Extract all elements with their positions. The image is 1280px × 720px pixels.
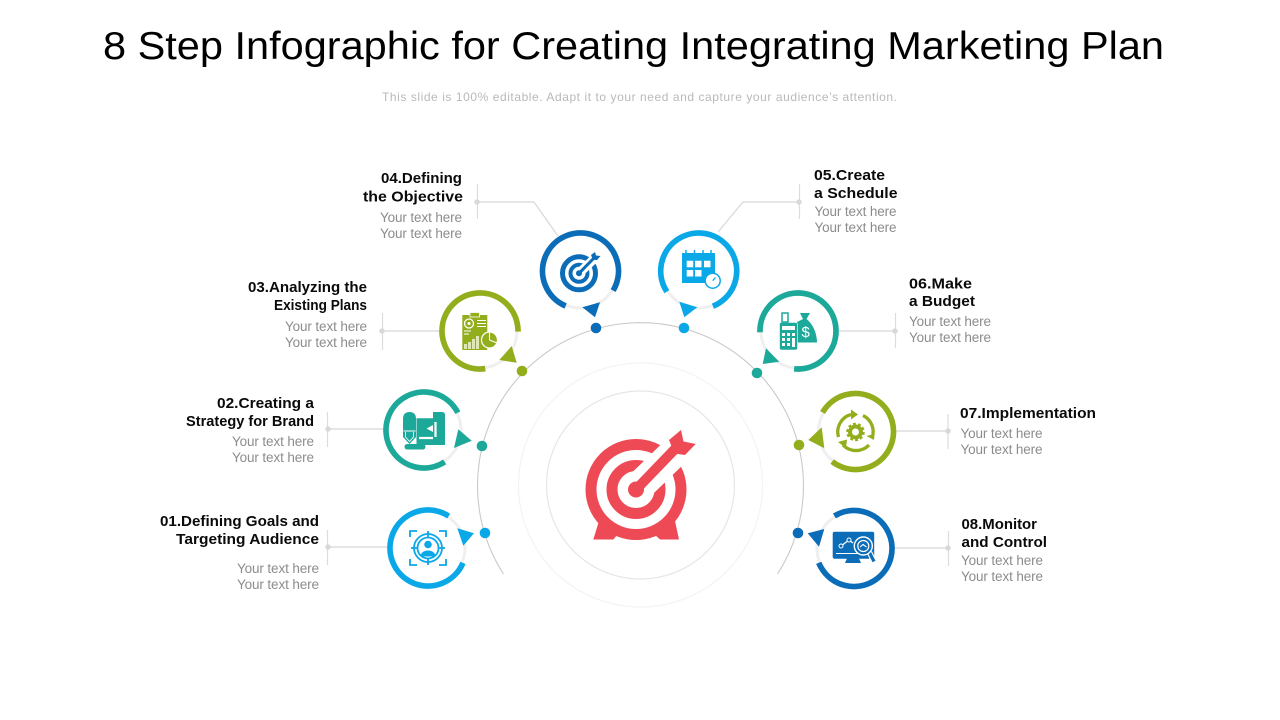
step 05 (646, 167, 898, 333)
label 05: Your text here (814, 220, 896, 235)
label 02: 02.Creating a (217, 395, 315, 412)
label 06: Your text here (909, 314, 991, 329)
central concentric rings (477, 323, 804, 607)
ring 04 with pointer (531, 221, 630, 333)
label 04: Your text here (380, 226, 462, 241)
label 05: a Schedule (814, 185, 898, 202)
label 03: 03.Analyzing the (248, 279, 367, 296)
label 03 (248, 279, 367, 350)
leader line 01 (325, 530, 388, 565)
label 05 (814, 167, 898, 235)
step 03 (248, 279, 527, 376)
label 05: 05.Create (814, 167, 885, 184)
label 03: Your text here (285, 319, 367, 334)
icon: calendar and clock (682, 250, 720, 288)
icon: blueprint strategy (403, 412, 445, 450)
step 02 (186, 377, 487, 483)
ring 05 with pointer (646, 218, 751, 333)
label 02: Strategy for Brand (186, 413, 314, 430)
label 03: Your text here (285, 335, 367, 350)
label 08: 08.Monitor (962, 516, 1037, 533)
icon: calculator and money bag (780, 313, 817, 350)
step 06 (752, 276, 991, 378)
leader line 06 (839, 313, 898, 348)
subtitle: This slide is 100% editable. Adapt it to your need and capture your audience’s attention. (382, 90, 897, 104)
label 05: Your text here (814, 204, 896, 219)
label 01: Your text here (237, 577, 319, 592)
label 04: 04.Defining (381, 170, 462, 187)
label 07: Your text here (960, 442, 1042, 457)
label 02: Your text here (232, 450, 314, 465)
leader line 02 (325, 412, 384, 447)
label 06: 06.Make (909, 276, 972, 292)
leader line 04 (474, 184, 558, 236)
label 08: and Control (962, 534, 1047, 551)
step 01 (160, 498, 490, 598)
label 04: the Objective (363, 188, 463, 206)
label 02 (186, 395, 315, 465)
ring 07 with pointer (794, 380, 907, 483)
ring 03 with pointer (437, 288, 527, 376)
icon: clipboard report (462, 312, 498, 350)
step 08 (793, 496, 1047, 601)
ring 08 with pointer (793, 496, 906, 601)
leader line 03 (379, 313, 440, 350)
label 04 (363, 170, 463, 241)
ring 01 with pointer (378, 498, 490, 598)
icon: monitor with magnifier (833, 532, 874, 563)
label 01 (160, 513, 319, 592)
step 07 (794, 380, 1096, 483)
label 08 (961, 516, 1047, 584)
label 04: Your text here (380, 210, 462, 225)
label 07: Your text here (960, 426, 1042, 441)
label 06: Your text here (909, 330, 991, 345)
label 08: Your text here (961, 553, 1043, 568)
icon: target (562, 252, 600, 290)
label 06 (909, 276, 991, 345)
leader line 05 (718, 184, 802, 232)
label 01: Your text here (237, 561, 319, 576)
label 01: 01.Defining Goals and (160, 513, 319, 530)
label 07: 07.Implementation (960, 405, 1096, 422)
label 08: Your text here (961, 569, 1043, 584)
label 07 (960, 405, 1096, 457)
label 06: a Budget (909, 293, 975, 310)
step 04 (363, 170, 630, 333)
icon: target audience (410, 531, 446, 565)
leader line 07 (896, 414, 951, 449)
icon: central target with arrow (591, 430, 696, 540)
ring 06 with pointer (752, 292, 837, 378)
label 01: Targeting Audience (176, 531, 319, 548)
title: 8 Step Infographic for Creating Integrating Marketing Plan (103, 25, 1164, 68)
icon: calculator and money bag: $ (802, 324, 810, 341)
ring 02 with pointer (371, 377, 487, 483)
icon: gear cycle (838, 410, 874, 451)
label 03: Existing Plans (274, 297, 367, 314)
label 02: Your text here (232, 434, 314, 449)
leader line 08 (894, 531, 951, 566)
